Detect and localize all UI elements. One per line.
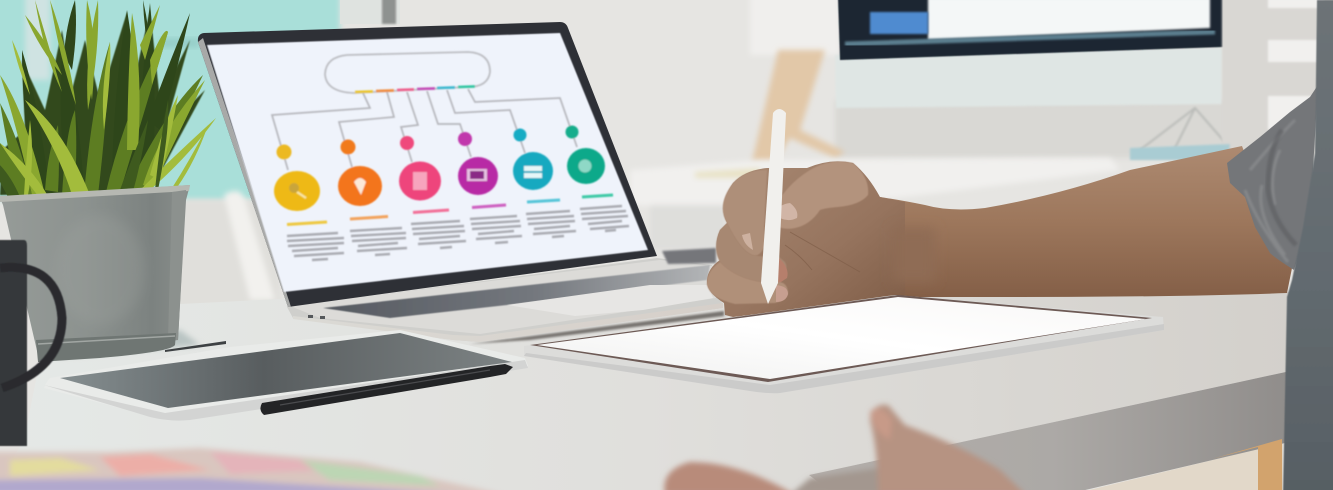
blurred wooden stand <box>752 50 845 162</box>
laptop trackpad <box>507 285 713 316</box>
foreground hand, out of focus <box>664 405 1026 490</box>
white stylus in hand <box>761 109 786 304</box>
laptop base <box>287 258 723 342</box>
screen infographic <box>272 52 629 260</box>
node 1: yellow <box>274 144 320 211</box>
thumb <box>770 162 868 229</box>
node 5: teal <box>513 128 553 190</box>
coloured title dashes <box>355 86 475 92</box>
node 2: orange <box>338 140 382 206</box>
placeholder text lines <box>287 206 629 260</box>
laptop shadow on desk <box>470 311 724 344</box>
palm creases <box>785 232 860 272</box>
dark leaf mass <box>0 10 205 195</box>
node 3: pink <box>399 136 441 200</box>
notebook spiral behind the hand <box>662 248 716 264</box>
wrist blend <box>893 228 935 282</box>
metal pot <box>0 185 190 362</box>
middle finger <box>716 223 786 282</box>
laptop ports <box>308 315 325 319</box>
tablet drawing surface <box>60 333 512 408</box>
coloured subheading bars <box>287 195 613 224</box>
white drawing tablet <box>524 295 1164 393</box>
connector lines <box>272 89 577 170</box>
t-shirt torso <box>1283 0 1333 490</box>
potted plant <box>0 0 216 362</box>
pot shadow <box>50 330 200 358</box>
node 6: green <box>566 126 605 184</box>
laptop keyboard <box>323 265 710 318</box>
wooden desk leg <box>1212 439 1282 490</box>
coloured swatches, out of focus <box>0 448 505 490</box>
stylus <box>260 364 513 415</box>
laptop screen <box>207 33 648 292</box>
desk side edge <box>809 370 1295 490</box>
blurred monitor in background <box>835 0 1230 150</box>
laptop lid <box>198 22 657 307</box>
writing hand <box>707 109 935 317</box>
graphics tablet <box>44 330 528 421</box>
t-shirt sleeve <box>1227 85 1318 270</box>
ring finger <box>707 262 788 304</box>
rounded title outline <box>325 52 490 93</box>
blurred shelf on the right <box>1130 0 1333 160</box>
tablet blank screen <box>537 297 1146 379</box>
palm and wrist <box>707 161 905 317</box>
blurred back desk <box>630 158 1120 250</box>
desk surface <box>0 292 1296 490</box>
plant leaves <box>0 0 216 197</box>
laptop <box>198 22 723 342</box>
node 4: purple <box>458 132 498 195</box>
right forearm <box>880 146 1292 297</box>
index finger <box>723 170 767 256</box>
dark mug, out of focus <box>0 240 62 446</box>
floor <box>1081 443 1283 490</box>
